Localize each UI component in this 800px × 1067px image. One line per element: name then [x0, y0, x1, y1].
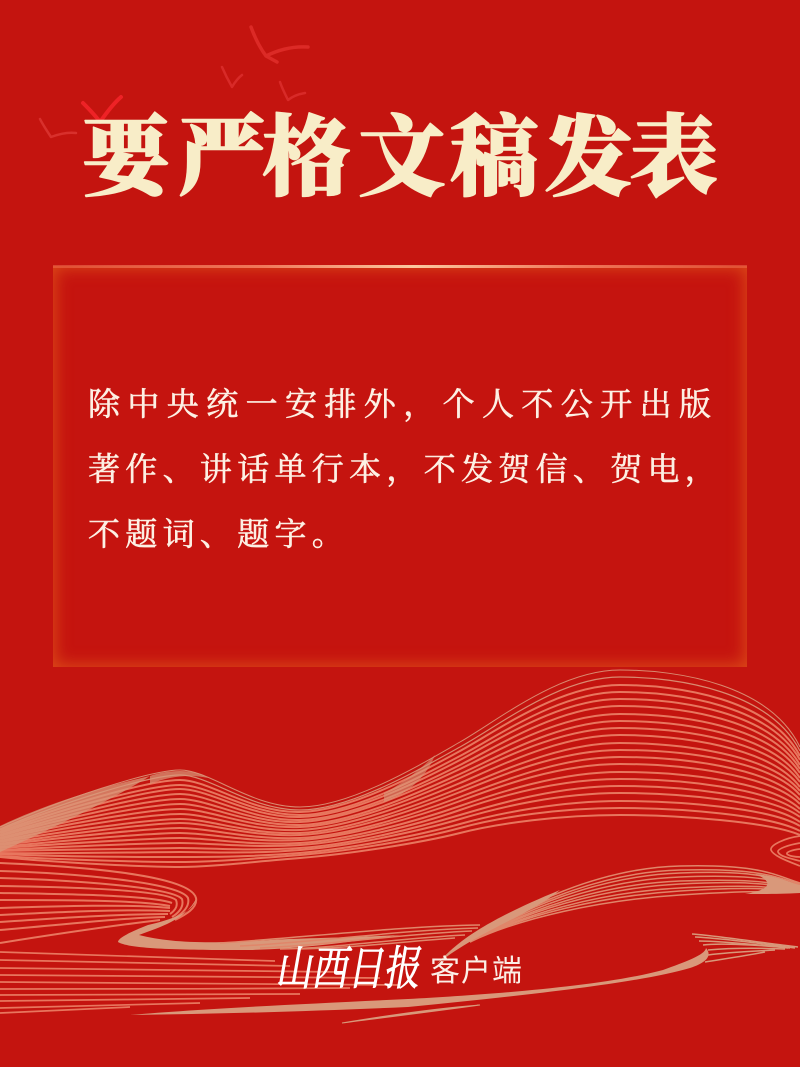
bird: bright left: [83, 97, 121, 122]
bird: far left: [40, 119, 76, 137]
text block: line 3: 不题词、题字。: [88, 516, 349, 552]
panel: main text box: [53, 266, 747, 667]
wave bundle: upper mountain: [0, 670, 800, 867]
text block: line 1: 除中央统一安排外，个人不公开出版: [88, 386, 718, 422]
wave bundle: lower left flat lines: [0, 952, 400, 1013]
bird flock: [38, 25, 310, 138]
wave bundle: left fold lines: [0, 863, 196, 943]
wave bundle: dense tan ridge: [0, 755, 435, 852]
bird: middle right: [280, 82, 305, 100]
wave bundle: bottom thin strand: [342, 1005, 480, 1023]
wave bundle: right hook fan: [692, 934, 798, 962]
title: 要严格文稿发表: [82, 111, 718, 208]
wave bundle: tan tail of rising band: [437, 874, 800, 964]
logo: client label: 客户端: [430, 955, 523, 988]
logo: newspaper name: 山西日报: [273, 943, 427, 995]
wave bundle: bottom tan ribbon: [130, 948, 709, 1015]
wave bundle: right edge small fold: [771, 836, 800, 866]
text block: line 2: 著作、讲话单行本，不发贺信、贺电，: [88, 451, 722, 487]
wave bundle: ribbon fan lines: [220, 925, 480, 949]
bird: middle left: [222, 67, 242, 87]
bird: large top: [251, 27, 308, 62]
wave bundle: tan fold ribbon: [118, 899, 400, 950]
wave bundle: right rising band: [470, 866, 800, 942]
